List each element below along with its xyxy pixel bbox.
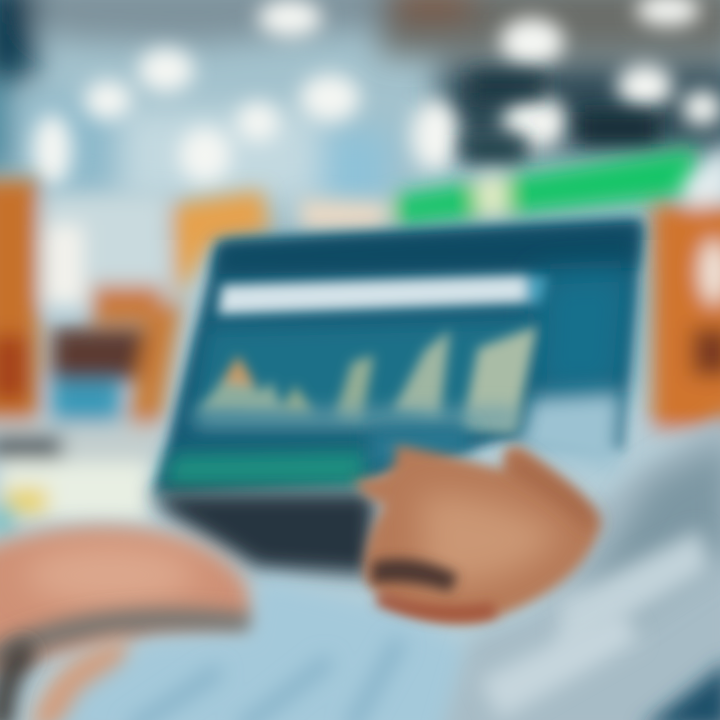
left forearm and hand [0, 527, 258, 720]
tablet body [155, 220, 642, 492]
right wall: orange panel [622, 145, 720, 482]
right hand pointing at tablet [355, 445, 600, 623]
ceiling lights [32, 0, 720, 186]
teal footer band [162, 450, 370, 490]
header bar [218, 275, 548, 315]
area and bar charts [198, 326, 537, 432]
lower right screen glare [515, 392, 622, 472]
tablet [150, 220, 642, 575]
background: office ceiling and windows [0, 0, 720, 240]
left wall: orange panels and shelves [0, 180, 270, 535]
tablet lower edge / keyboard [150, 492, 375, 575]
chart panel [192, 320, 535, 425]
shirt sleeves [50, 410, 720, 720]
green banner [298, 148, 698, 232]
